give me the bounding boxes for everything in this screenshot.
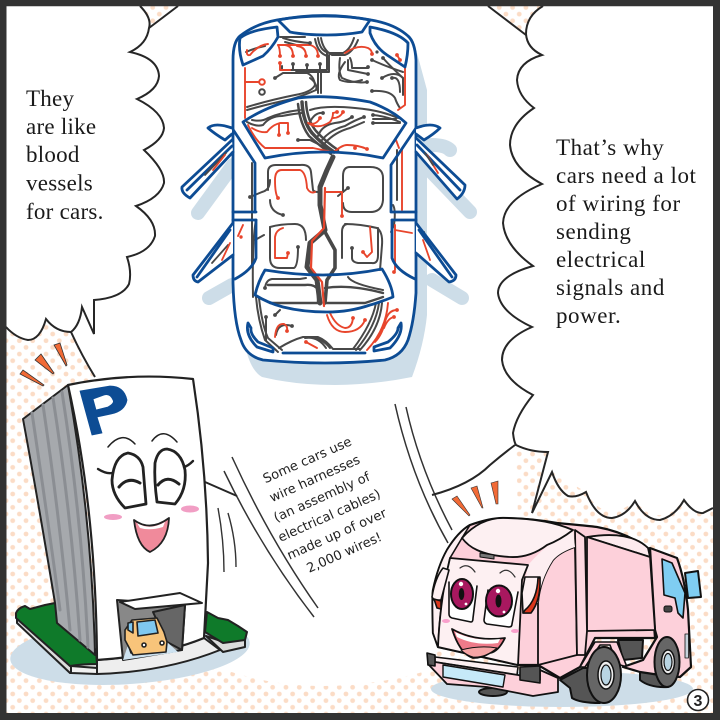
speech bubble: double lines around centre note <box>224 404 452 617</box>
door handle <box>664 606 672 612</box>
ground shadow <box>8 610 252 692</box>
tower side <box>23 385 95 655</box>
character: parking building <box>8 377 252 692</box>
truck eye panels <box>449 582 518 627</box>
small yellow car <box>125 618 167 655</box>
note: wire harnesses: wire harnesses <box>268 453 363 506</box>
car shadow <box>198 53 470 385</box>
rear face <box>438 558 528 665</box>
roof dome <box>462 518 573 557</box>
text: They are like blood vessels for cars: vessels <box>26 170 93 196</box>
note: wire harnesses: electrical cables) <box>276 487 383 546</box>
text: That's why cars need a lot of wiring: signals and <box>556 275 665 300</box>
base slab <box>97 638 220 674</box>
connector lines <box>205 445 515 496</box>
lawn left <box>16 603 97 674</box>
text: That's why cars need a lot of wiring: cars need a lot <box>556 163 696 188</box>
truck mouth <box>452 629 505 658</box>
door: rear right <box>416 223 456 282</box>
car body outline <box>233 16 416 363</box>
truck cargo body <box>432 518 655 678</box>
side lamp left <box>432 568 449 609</box>
door wires <box>205 153 438 263</box>
side lamp right <box>522 577 540 613</box>
panel number 3: 3 <box>694 693 703 710</box>
bumper dark blocks <box>427 653 540 683</box>
note: wire harnesses: 2,000 wires! <box>305 530 384 577</box>
text: That's why cars need a lot of wiring: That’s why <box>556 135 664 160</box>
speech bubble: right <box>488 6 713 520</box>
text: That's why cars need a lot of wiring: of wiring for <box>556 191 681 216</box>
door: front left <box>182 125 233 198</box>
truck eyes <box>451 579 512 616</box>
cab window <box>662 559 685 618</box>
wheel arch <box>580 642 627 667</box>
car wiring diagram <box>182 16 470 385</box>
cargo panels <box>522 530 655 665</box>
text: That's why cars need a lot of wiring: electrical <box>556 247 646 272</box>
note: wire harnesses <box>261 435 390 577</box>
building eyes <box>98 434 193 508</box>
cab marker light <box>685 634 688 658</box>
excitement marks: truck <box>452 481 498 516</box>
bumper strip <box>435 657 518 675</box>
text: That's why cars need a lot of wiring: power. <box>556 303 621 328</box>
door: rear left <box>193 223 233 282</box>
text: They are like blood vessels for cars: for cars. <box>26 199 104 224</box>
character: pink truck <box>427 518 701 707</box>
lawn right <box>205 612 247 652</box>
letter P <box>80 386 127 435</box>
note: wire harnesses: Some cars use <box>261 435 354 487</box>
rear wheel <box>587 647 621 703</box>
wires: main trunk <box>307 157 335 306</box>
truck ground shadow <box>431 671 693 707</box>
wires: red circuits <box>238 44 412 350</box>
wire connector dots <box>248 41 394 328</box>
number plate <box>443 665 505 687</box>
note: wire harnesses: (an assembly of <box>272 470 373 526</box>
building mouth <box>134 518 169 552</box>
fuse ring connectors <box>259 79 265 95</box>
garage <box>117 593 202 660</box>
speech bubble: left <box>6 6 178 377</box>
tower front <box>68 377 208 660</box>
panel number 3 <box>688 690 708 710</box>
truck brows <box>460 566 515 577</box>
note: wire harnesses: made up of over <box>285 506 390 563</box>
lower bumper <box>428 662 558 696</box>
motion lines <box>218 508 236 572</box>
text: They are like blood vessels for cars: blood <box>26 142 80 167</box>
text: That's why cars need a lot of wiring: sending <box>556 219 631 244</box>
axle and tyre tread <box>479 640 668 703</box>
building cheeks <box>104 506 199 520</box>
truck cheeks <box>442 619 519 633</box>
cab <box>623 548 691 677</box>
text: They are like blood vessels for cars: are like <box>26 114 96 139</box>
cab mirror <box>685 571 701 598</box>
front wheel <box>654 637 680 687</box>
wires: dark harness <box>246 37 428 352</box>
rear corner strip <box>432 525 470 647</box>
car frame, windows and doors <box>182 16 465 353</box>
text: They are like blood vessels for cars: They <box>26 86 75 111</box>
excitement marks: building <box>20 343 67 386</box>
door: front right <box>416 125 465 199</box>
roof vent <box>480 553 494 559</box>
wire connector dots red <box>239 52 402 344</box>
